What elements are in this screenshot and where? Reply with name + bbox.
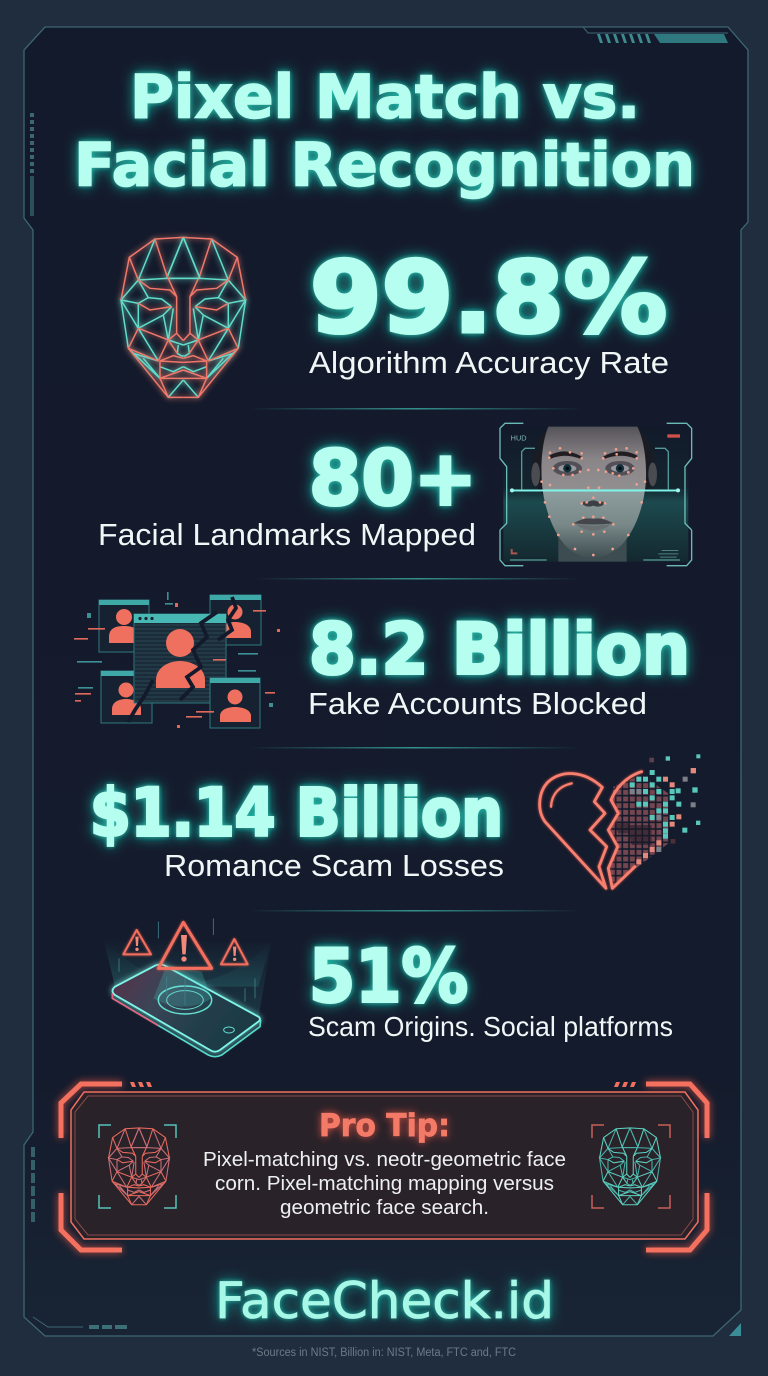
illustration: HUD face scan: HUD [511,434,527,443]
stat: algorithm accuracy: 99.8% [310,242,667,356]
tip brackets [61,1084,707,1250]
window: top left [99,600,149,652]
tip body text: corn. Pixel-matching mapping versus [215,1172,554,1195]
head [541,427,646,558]
tip inner box [71,1092,698,1239]
stat: scam origins: Scam Origins. Social platforms [308,1011,673,1042]
title: Facial Recognition [74,130,695,200]
tip body text: geometric face search. [280,1196,489,1219]
phone [112,964,261,1057]
illustration: fake account windows [74,592,280,728]
stat: facial landmarks [98,434,477,552]
illustration: phone with warnings [103,918,272,1057]
window: center [134,614,226,703]
stat: fake accounts: Fake Accounts Blocked [308,686,647,721]
tip left face [99,1125,176,1208]
heart outline [540,772,642,888]
stat: fake accounts: 8.2 Billion [309,608,690,690]
stat: facial landmarks: 80+ [309,434,477,522]
divider [255,578,579,580]
stat: facial landmarks: Facial Landmarks Mapped [98,517,476,552]
warning triangles [123,922,248,968]
title [74,62,695,200]
divider [248,747,580,748]
stat: romance scam losses [90,774,504,883]
illustration: HUD face scan [500,423,692,566]
neck [558,532,627,562]
divider [248,910,580,912]
window: top right [210,595,261,645]
tip body text [203,1148,566,1219]
stat: scam origins: 51% [309,934,468,1020]
window: bottom left [101,671,152,723]
title: Pixel Match vs. [130,62,640,132]
icon: wireframe face [121,237,246,397]
divider [250,408,582,410]
stat: algorithm accuracy: Algorithm Accuracy Rate [309,345,669,380]
tip body text: Pixel-matching vs. neotr-geometric face [203,1148,566,1171]
stat: romance scam losses: Romance Scam Losses [164,848,504,883]
stat: scam origins [308,934,673,1042]
tip right face [592,1125,670,1208]
panel: pro tip [61,1082,707,1250]
scan line [510,488,680,492]
heart pixels [610,754,700,885]
icon: broken pixel heart [540,754,700,888]
hair and ears [531,427,657,495]
facial features [549,451,637,531]
landmark dots [540,447,646,556]
window: bottom right [210,678,260,728]
tip heading: Pro Tip: [319,1108,450,1144]
footer sources: *Sources in NIST, Billion in: NIST, Meta, FTC and, FTC [252,1347,516,1359]
stat: romance scam losses: $1.14 Billion [90,774,503,852]
hud frame [500,423,692,566]
brand wordmark: FaceCheck.id [215,1272,554,1330]
